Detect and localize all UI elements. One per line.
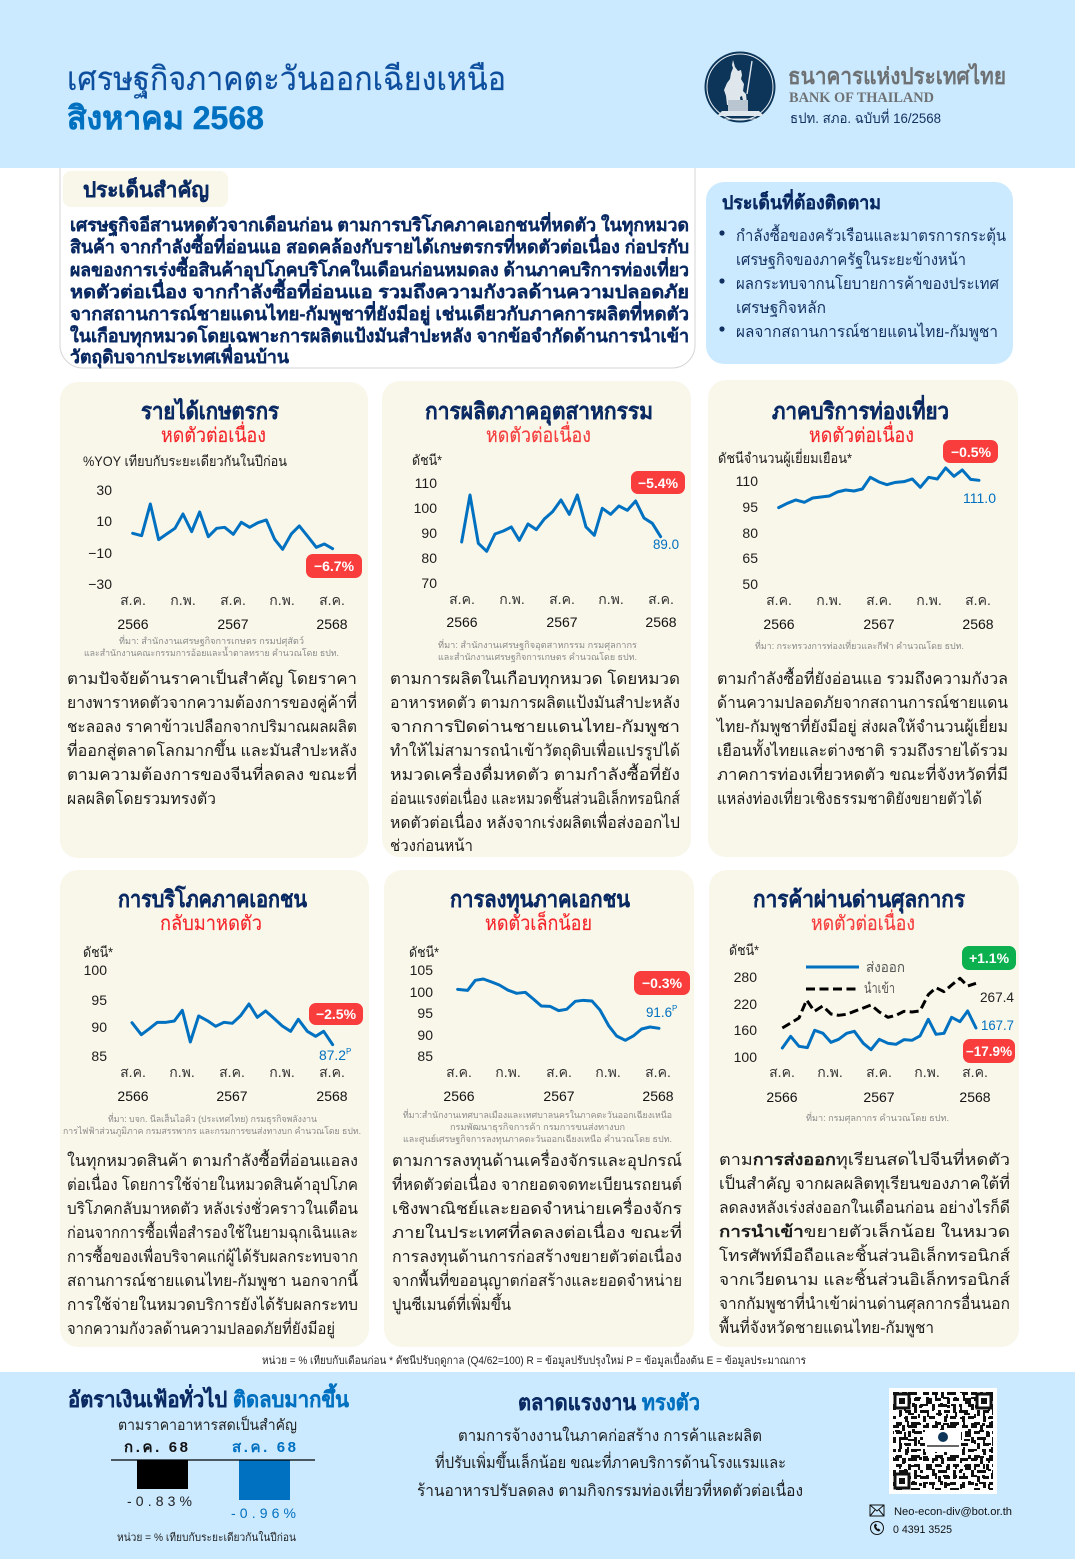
line chart: 95 xyxy=(91,992,107,1008)
body text: ลดลงหลังเร่งส่งออกในเดือนก่อน อย่างไรก็ดี xyxy=(719,1197,1010,1217)
body text xyxy=(392,1149,682,1315)
body text: ภาคการท่องเที่ยวหดตัว ขณะที่จังหวัดที่มี xyxy=(717,763,1008,784)
source xyxy=(84,634,339,658)
watch list xyxy=(719,224,1006,342)
line chart: 10 xyxy=(96,513,112,529)
line chart: P xyxy=(672,1004,677,1013)
line chart: ส.ค. xyxy=(866,1064,892,1080)
line chart: ส.ค. xyxy=(866,592,892,608)
line chart: 80 xyxy=(742,525,758,541)
line chart: −10 xyxy=(88,545,112,561)
body text: ปูนซีเมนต์ที่เพิ่มขึ้น xyxy=(392,1293,511,1315)
line chart: ส.ค. xyxy=(120,592,146,608)
line chart: ส.ค. xyxy=(319,592,345,608)
source xyxy=(63,1112,361,1137)
body text: ไทย-กัมพูชาที่ยังมีอยู่ ส่งผลให้จำนวนผู้เยี่ยม xyxy=(715,715,1008,737)
line chart: −30 xyxy=(88,576,112,592)
body text: จากเวียดนาม และชิ้นส่วนอิเล็กทรอนิกส์ xyxy=(719,1268,1010,1289)
watch list: ผลจากสถานการณ์ชายแดนไทย-กัมพูชา xyxy=(736,322,998,342)
line chart: 160 xyxy=(734,1022,757,1038)
body text: เชิงพาณิชย์และยอดจำหน่ายเครื่องจักร xyxy=(392,1197,682,1218)
body text: ด้านความปลอดภัยจากสถานการณ์ชายแดน xyxy=(717,693,1008,712)
watch list: เศรษฐกิจของภาครัฐในระยะข้างหน้า xyxy=(736,250,966,269)
legend xyxy=(806,959,905,996)
source: กรมพัฒนาธุรกิจการค้า กรมการขนส่งทางบก xyxy=(450,1122,625,1133)
body text: สถานการณ์ชายแดนไทย-กัมพูชา นอกจากนี้ xyxy=(67,1269,358,1291)
line chart: 2566 xyxy=(117,616,149,632)
line chart: ก.พ. xyxy=(817,1064,843,1080)
line chart: 2566 xyxy=(766,1089,798,1105)
footnote: หน่วย = % เทียบกับเดือนก่อน * ดัชนีปรับฤดูกาล (Q4/62=100) R = ข้อมูลปรับปรุงใหม่ P = ข้อมูลเบื้องต้น E = ข้อมูลประมาณการ xyxy=(262,1352,806,1367)
line chart: +1.1% xyxy=(969,950,1010,966)
contact details xyxy=(870,1505,1012,1536)
body text: ที่หดตัวต่อเนื่อง จากยอดจดทะเบียนรถยนต์ xyxy=(392,1173,682,1194)
bottom band xyxy=(0,1372,1075,1559)
body text: จากกัมพูชาที่นำเข้าผ่านด่านศุลกากรอื่นนอก xyxy=(719,1292,1010,1314)
bar chart: ก.ค. 68 xyxy=(124,1439,188,1456)
body text: ตามการส่งออก ทุเรียนสดไปจีนที่หดตัว xyxy=(719,1148,1010,1170)
line chart xyxy=(718,440,998,632)
heading: กลับมาหดตัว xyxy=(160,913,262,935)
body text: การนำเข้า ขยายตัวเล็กน้อย ในหมวด xyxy=(719,1221,1010,1241)
line chart xyxy=(409,944,690,1104)
body text: เยือนทั้งไทยและต่างชาติ รวมถึงรายได้รวม xyxy=(717,739,1008,760)
line chart: 30 xyxy=(96,482,112,498)
source: ที่มา: สำนักงานเศรษฐกิจการเกษตร กรมปศุสัตว์ xyxy=(119,634,304,647)
line chart: ดัชนีจำนวนผู้เยี่ยมเยือน* xyxy=(718,449,852,467)
source: และสำนักงานคณะกรรมการอ้อยและน้ำตาลทราย คำนวณโดย ธปท. xyxy=(84,646,339,658)
heading: หดตัวเล็กน้อย xyxy=(485,910,592,935)
line chart: 105 xyxy=(410,962,433,978)
line chart: ส.ค. xyxy=(220,592,246,608)
inflation heading: อัตราเงินเฟ้อทั่วไป ติดลบมากขึ้น xyxy=(68,1383,349,1412)
source: การไฟฟ้าส่วนภูมิภาค กรมสรรพากร และกรมการขนส่งทางบก คำนวณโดย ธปท. xyxy=(63,1126,361,1137)
line chart: −2.5% xyxy=(316,1006,357,1022)
line chart: 2568 xyxy=(645,614,677,630)
body text xyxy=(67,1149,358,1339)
line chart: 89.0 xyxy=(653,536,679,552)
line chart: 90 xyxy=(91,1019,107,1035)
body text: อาหารหดตัว ตามการผลิตแป้งมันสำปะหลัง xyxy=(390,694,680,712)
line chart xyxy=(83,944,363,1104)
heading: การค้าผ่านด่านศุลกากร xyxy=(753,886,966,914)
line chart: 2568 xyxy=(962,616,994,632)
line chart: −0.3% xyxy=(642,975,683,991)
line chart: 80 xyxy=(421,550,437,566)
source: ที่มา: กระทรวงการท่องเที่ยวและกีฬา คำนวณโดย ธปท. xyxy=(755,639,964,651)
subtitle: month: สิงหาคม 2568 xyxy=(67,100,264,136)
bar chart: ส.ค. 68 xyxy=(232,1439,296,1456)
body text: พื้นที่จังหวัดชายแดนไทย-กัมพูชา xyxy=(719,1316,934,1338)
source: และศูนย์เศรษฐกิจการลงทุนภาคตะวันออกเฉียงเหนือ คำนวณโดย ธปท. xyxy=(403,1133,672,1145)
line chart: 100 xyxy=(734,1049,757,1065)
heading: หดตัวต่อเนื่อง xyxy=(161,421,266,447)
line chart: 90 xyxy=(421,525,437,541)
body text: อ่อนแรงต่อเนื่อง และหมวดชิ้นส่วนอิเล็กทรอนิกส์ xyxy=(390,787,680,808)
line chart: 220 xyxy=(734,996,757,1012)
panel: private investment xyxy=(384,870,694,1347)
labour heading: ตลาดแรงงาน ทรงตัว xyxy=(518,1390,700,1415)
body text: เป็นสำคัญ จากผลผลิตทุเรียนของภาคใต้ที่ xyxy=(719,1172,1010,1194)
line chart: 2567 xyxy=(543,1088,575,1104)
line chart: −17.9% xyxy=(966,1044,1012,1059)
line chart: 2566 xyxy=(446,614,478,630)
body text: ภายในประเทศที่ลดลงต่อเนื่อง ขณะที่ xyxy=(392,1221,682,1242)
line chart: ก.พ. xyxy=(595,1064,621,1080)
line chart: ก.พ. xyxy=(269,1064,295,1080)
panel: farm income xyxy=(60,382,368,858)
key points heading: ประเด็นสำคัญ xyxy=(83,176,209,203)
key points text: จากสถานการณ์ชายแดนไทย-กัมพูชาที่ยังมีอยู่ เช่นเดียวกับภาคการผลิตที่หดตัว xyxy=(70,301,689,326)
line chart: 85 xyxy=(91,1048,107,1064)
body text: จากพื้นที่ขออนุญาตก่อสร้างและยอดจำหน่าย xyxy=(392,1269,682,1291)
body text: หดตัวต่อเนื่อง หลังจากเร่งผลิตเพื่อส่งออกไป xyxy=(390,811,680,832)
watch list: เศรษฐกิจหลัก xyxy=(736,300,826,317)
body text: ตามกำลังซื้อที่ยังอ่อนแอ รวมถึงความกังวล xyxy=(717,667,1008,688)
line chart: ก.พ. xyxy=(170,592,196,608)
body text: ตามความต้องการของจีนที่ลดลง ขณะที่ xyxy=(67,763,357,784)
line chart: 91.6 xyxy=(646,1004,672,1020)
line chart: 111.0 xyxy=(963,490,996,506)
panel: inflation xyxy=(68,1383,349,1544)
watch list: ผลกระทบจากนโยบายการค้าของประเทศ xyxy=(736,274,999,293)
line chart: 95 xyxy=(417,1005,433,1021)
body text: ก่อนจากการซื้อเพื่อสำรองใช้ในยามฉุกเฉินและ xyxy=(67,1221,358,1243)
line chart: 87.2 xyxy=(319,1047,346,1063)
key points text: เศรษฐกิจอีสานหดตัวจากเดือนก่อน ตามการบริโภคภาคเอกชนที่หดตัว ในทุกหมวด xyxy=(70,212,689,237)
source: ที่มา:สำนักงานเทศบาลเมืองและเทศบาลนครในภาคตะวันออกเฉียงเหนือ xyxy=(403,1108,672,1120)
line chart: −5.4% xyxy=(638,475,679,491)
line chart: 2567 xyxy=(217,616,249,632)
line chart: 90 xyxy=(417,1027,433,1043)
line chart: ดัชนี* xyxy=(729,942,759,958)
line chart: P xyxy=(346,1047,351,1056)
QR code xyxy=(889,1388,997,1494)
icon: phone xyxy=(870,1522,884,1534)
body text: การซื้อของเพื่อบริจาคแก่ผู้ได้รับผลกระทบจาก xyxy=(67,1245,358,1267)
body text: บริโภคกลับมาหดตัว หลังเร่งชั่วคราวในเดือน xyxy=(67,1197,358,1218)
panel: tourism xyxy=(708,380,1018,857)
heading: การบริโภคภาคเอกชน xyxy=(118,885,307,912)
line chart: 2567 xyxy=(546,614,578,630)
line chart: 2568 xyxy=(316,1088,348,1104)
line chart: 2568 xyxy=(959,1089,991,1105)
inflation subheading: ตามราคาอาหารสดเป็นสำคัญ xyxy=(118,1415,297,1434)
body text: ต่อเนื่อง โดยการใช้จ่ายในหมวดสินค้าอุปโภค xyxy=(67,1173,358,1195)
body text: การใช้จ่ายในหมวดบริการยังได้รับผลกระทบ xyxy=(67,1295,358,1314)
line chart: ส.ค. xyxy=(645,1064,671,1080)
line chart: 2566 xyxy=(763,616,795,632)
body text xyxy=(719,1148,1010,1338)
icon: envelope xyxy=(870,1505,884,1516)
line chart: ส.ค. xyxy=(546,1064,572,1080)
line chart xyxy=(83,453,362,632)
panel: private consumption xyxy=(60,870,369,1347)
panel: labour market xyxy=(417,1390,803,1500)
line chart: 2567 xyxy=(863,616,895,632)
line chart: 110 xyxy=(736,473,758,489)
key points heading xyxy=(63,171,228,207)
line chart: ดัชนี* xyxy=(412,452,442,468)
body text: ที่ออกสู่ตลาดโลกมากขึ้น และมันสำปะหลัง xyxy=(67,739,357,761)
line chart: ส.ค. xyxy=(449,591,475,607)
line chart: ส.ค. xyxy=(648,591,674,607)
heading xyxy=(772,394,949,447)
line chart: 110 xyxy=(415,475,437,491)
line chart: 50 xyxy=(742,576,758,592)
line chart: 95 xyxy=(742,499,758,515)
body text xyxy=(67,668,357,808)
body text: ชะลอลง ราคาข้าวเปลือกจากปริมาณผลผลิต xyxy=(67,718,357,736)
line chart: ก.พ. xyxy=(269,592,295,608)
body text: ช่วงก่อนหน้า xyxy=(390,837,473,855)
body text: ทำให้ไม่สามารถนำเข้าวัตถุดิบเพื่อแปรรูปได้ xyxy=(390,739,680,761)
bar chart xyxy=(111,1439,315,1521)
line chart: ดัชนี* xyxy=(83,944,113,960)
body text: แหล่งท่องเที่ยวเชิงธรรมชาติยังขยายตัวได้ xyxy=(717,787,982,808)
key points text xyxy=(70,212,689,369)
legend: นำเข้า xyxy=(864,980,895,996)
watch heading: ประเด็นที่ต้องติดตาม xyxy=(722,189,881,214)
heading: หดตัวต่อเนื่อง xyxy=(811,909,915,935)
line chart: 2566 xyxy=(443,1088,475,1104)
line chart xyxy=(729,942,1016,1105)
body text: จากการปิดด่านชายแดนไทย-กัมพูชา xyxy=(390,717,680,737)
labour text: ร้านอาหารปรับลดลง ตามกิจกรรมท่องเที่ยวที่หดตัวต่อเนื่อง xyxy=(417,1479,803,1500)
line chart: ส.ค. xyxy=(769,1064,795,1080)
heading: รายได้เกษตรกร xyxy=(141,397,280,424)
bar chart: -0.96% xyxy=(231,1505,296,1521)
line chart: −6.7% xyxy=(314,558,355,574)
line chart: 167.7 xyxy=(981,1017,1014,1033)
line chart: ก.พ. xyxy=(916,592,942,608)
line chart: 65 xyxy=(742,550,758,566)
line chart: 2568 xyxy=(316,616,348,632)
labour text: ตามการจ้างงานในภาคก่อสร้าง การค้าและผลิต xyxy=(458,1426,762,1445)
line chart: ส.ค. xyxy=(962,1064,988,1080)
key points text: ในเกือบทุกหมวดโดยเฉพาะการผลิตแป้งมันสำปะหลัง จากข้อจำกัดด้านการนำเข้า xyxy=(70,325,689,348)
body text: ในทุกหมวดสินค้า ตามกำลังซื้อที่อ่อนแอลง xyxy=(67,1149,358,1171)
body text: ยางพาราหดตัวจากความต้องการของคู่ค้าที่ xyxy=(67,691,357,713)
panel: manufacturing xyxy=(382,381,691,857)
bank name: ธปท. สภอ. ฉบับที่ 16/2568 xyxy=(790,109,941,126)
line chart: 85 xyxy=(417,1048,433,1064)
line chart: ก.พ. xyxy=(499,591,525,607)
line chart: −0.5% xyxy=(951,444,992,460)
source: ที่มา: กรมศุลกากร คำนวณโดย ธปท. xyxy=(806,1111,949,1124)
line chart: 2566 xyxy=(117,1088,149,1104)
heading: ภาคบริการท่องเที่ยว xyxy=(772,394,949,424)
key points text: หดตัวต่อเนื่อง จากกำลังซื้อที่อ่อนแอ รวมถึงความกังวลด้านความปลอดภัย xyxy=(70,278,689,302)
labour text: ที่ปรับเพิ่มขึ้นเล็กน้อย ขณะที่ภาคบริการด้านโรงแรมและ xyxy=(435,1451,786,1472)
heading xyxy=(753,886,966,935)
body text xyxy=(715,667,1008,808)
bank name: BANK OF THAILAND xyxy=(789,90,934,106)
key points text: ผลของการเร่งซื้อสินค้าอุปโภคบริโภคในเดือนก่อนหมดลง ด้านภาคบริการท่องเที่ยว xyxy=(70,256,689,282)
source: และสำนักงานเศรษฐกิจการเกษตร คำนวณโดย ธปท. xyxy=(438,652,637,663)
line chart: ส.ค. xyxy=(319,1064,345,1080)
line chart: ดัชนี* xyxy=(409,944,439,960)
line chart: 280 xyxy=(734,969,757,985)
body text: ผลผลิตโดยรวมทรงตัว xyxy=(67,789,216,808)
line chart: 2567 xyxy=(216,1088,248,1104)
key points text: สินค้า จากกำลังซื้อที่อ่อนแอ สอดคล้องกับรายได้เกษตรกรที่หดตัวต่อเนื่อง ก่อปรกับ xyxy=(70,233,689,257)
labour text xyxy=(417,1426,803,1500)
source: ที่มา: บจก. นีลเส็นไอคิว (ประเทศไทย) กรมธุรกิจพลังงาน xyxy=(108,1112,317,1125)
line chart: %YOY เทียบกับระยะเดียวกันในปีก่อน xyxy=(83,453,287,469)
bank name: ธนาคารแห่งประเทศไทย xyxy=(788,62,1006,89)
line chart: 100 xyxy=(84,962,107,978)
panel: issues to watch xyxy=(706,182,1013,364)
heading: การลงทุนภาคเอกชน xyxy=(450,886,630,914)
header band xyxy=(0,0,1075,168)
bank name xyxy=(788,62,1006,126)
heading: หดตัวต่อเนื่อง xyxy=(486,421,591,447)
panel: border trade xyxy=(709,870,1019,1347)
body text: โทรศัพท์มือถือและชิ้นส่วนอิเล็กทรอนิกส์ xyxy=(719,1244,1010,1265)
line chart: ส.ค. xyxy=(766,592,792,608)
line chart: 2567 xyxy=(863,1089,895,1105)
contact details: 0 4391 3525 xyxy=(893,1524,952,1536)
body text: หมวดเครื่องดื่มหดตัว ตามกำลังซื้อที่ยัง xyxy=(390,763,680,784)
source: ที่มา: สำนักงานเศรษฐกิจอุตสาหกรรม กรมศุลกากร xyxy=(438,638,637,651)
line chart: ก.พ. xyxy=(495,1064,521,1080)
line chart: ส.ค. xyxy=(549,591,575,607)
line chart: ก.พ. xyxy=(816,592,842,608)
heading: หดตัวต่อเนื่อง xyxy=(809,421,914,447)
line chart: 100 xyxy=(414,500,437,516)
contact details: Neo-econ-div@bot.or.th xyxy=(894,1506,1012,1518)
line chart: 70 xyxy=(421,575,437,591)
heading: การผลิตภาคอุตสาหกรรม xyxy=(425,398,653,426)
line chart: ก.พ. xyxy=(169,1064,195,1080)
source xyxy=(438,638,637,663)
body text: จากความกังวลด้านความปลอดภัยที่ยังมีอยู่ xyxy=(67,1317,335,1339)
line chart: 267.4 xyxy=(980,989,1014,1005)
body text: การลงทุนด้านการก่อสร้างขยายตัวต่อเนื่อง xyxy=(392,1245,682,1267)
line chart: ส.ค. xyxy=(446,1064,472,1080)
heading xyxy=(141,397,280,447)
heading xyxy=(450,886,630,935)
line chart: ก.พ. xyxy=(598,591,624,607)
body text: ตามการลงทุนด้านเครื่องจักรและอุปกรณ์ xyxy=(392,1149,682,1171)
line chart xyxy=(412,452,685,630)
unit note: หน่วย = % เทียบกับระยะเดียวกันในปีก่อน xyxy=(117,1531,296,1544)
heading xyxy=(425,398,653,447)
source xyxy=(403,1108,672,1145)
panel: key points xyxy=(60,168,695,369)
heading xyxy=(118,885,307,935)
bar chart: -0.83% xyxy=(127,1493,192,1509)
line chart: 100 xyxy=(410,984,433,1000)
title: เศรษฐกิจภาคตะวันออกเฉียงเหนือ xyxy=(67,60,506,99)
legend: ส่งออก xyxy=(866,959,905,975)
line chart: ส.ค. xyxy=(965,592,991,608)
body text: ตามการผลิตในเกือบทุกหมวด โดยหมวด xyxy=(390,669,680,689)
body text: ตามปัจจัยด้านราคาเป็นสำคัญ โดยราคา xyxy=(67,668,357,688)
key points text: วัตถุดิบจากประเทศเพื่อนบ้าน xyxy=(70,344,290,369)
icon: Bank of Thailand seal xyxy=(704,52,776,122)
watch list: กำลังซื้อของครัวเรือนและมาตรการกระตุ้น xyxy=(736,224,1006,246)
line chart: ส.ค. xyxy=(219,1064,245,1080)
line chart: ส.ค. xyxy=(120,1064,146,1080)
line chart: 2568 xyxy=(642,1088,674,1104)
body text xyxy=(390,669,680,855)
line chart: ก.พ. xyxy=(914,1064,940,1080)
